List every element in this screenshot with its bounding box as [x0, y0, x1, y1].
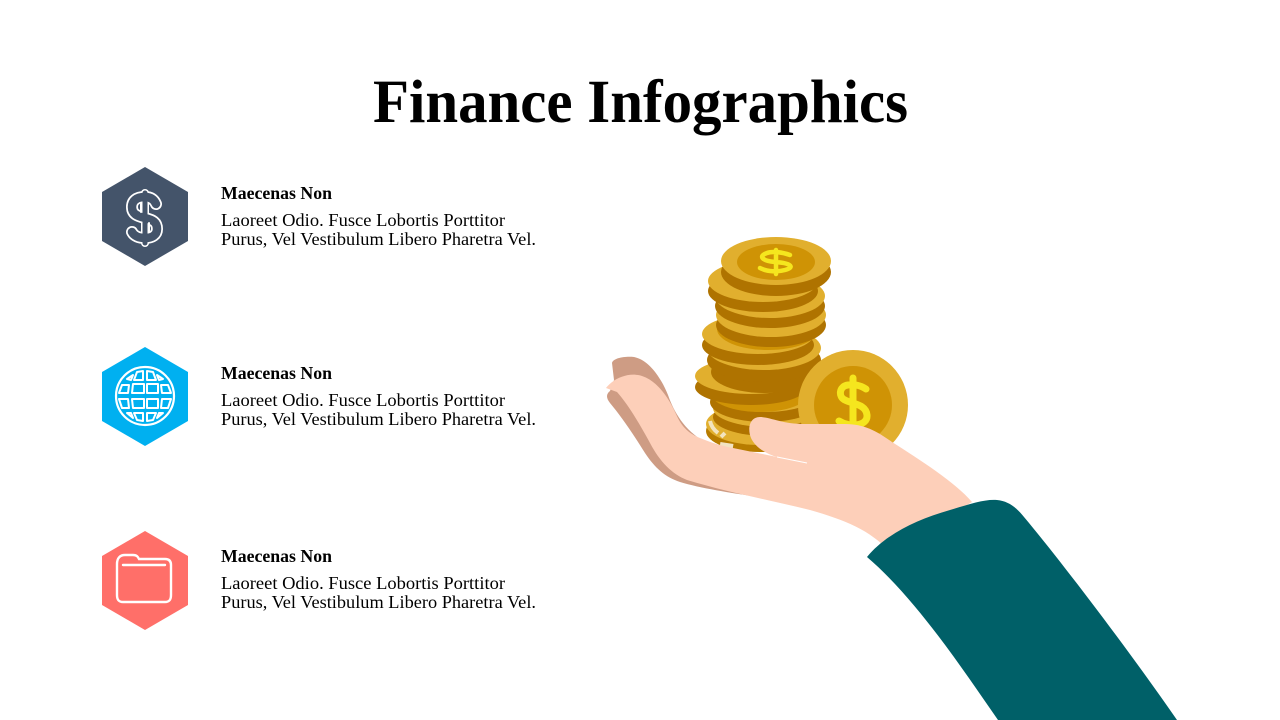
panel: item 3: [102, 531, 536, 630]
text block: Laoreet Odio. Fusce Lobortis Porttitor: [221, 210, 505, 230]
text block: Laoreet Odio. Fusce Lobortis Porttitor: [221, 390, 505, 410]
sleeve: [867, 500, 1177, 720]
hand: [606, 375, 972, 552]
icon: globe in blue hexagon: [102, 347, 188, 446]
panel: item 1: [102, 167, 536, 266]
text block: [221, 210, 536, 249]
icon: dollar in slate hexagon: [102, 167, 188, 266]
heading: Maecenas Non: [221, 363, 332, 383]
coin stack: [695, 237, 831, 452]
text block: Purus, Vel Vestibulum Libero Pharetra Vel.: [221, 592, 536, 612]
panel: item 2: [102, 347, 536, 446]
text block: Laoreet Odio. Fusce Lobortis Porttitor: [221, 573, 505, 593]
icon: folder in coral hexagon: [102, 531, 188, 630]
illustration: hand holding coins: [606, 237, 1177, 720]
text block: Purus, Vel Vestibulum Libero Pharetra Vel.: [221, 409, 536, 429]
hand shadow: [607, 357, 760, 497]
big coin: [798, 350, 908, 460]
text block: [221, 390, 536, 429]
text block: [221, 573, 536, 612]
title: Finance Infographics: [373, 69, 908, 136]
heading: Maecenas Non: [221, 183, 332, 203]
text block: Purus, Vel Vestibulum Libero Pharetra Vel.: [221, 229, 536, 249]
heading: Maecenas Non: [221, 546, 332, 566]
